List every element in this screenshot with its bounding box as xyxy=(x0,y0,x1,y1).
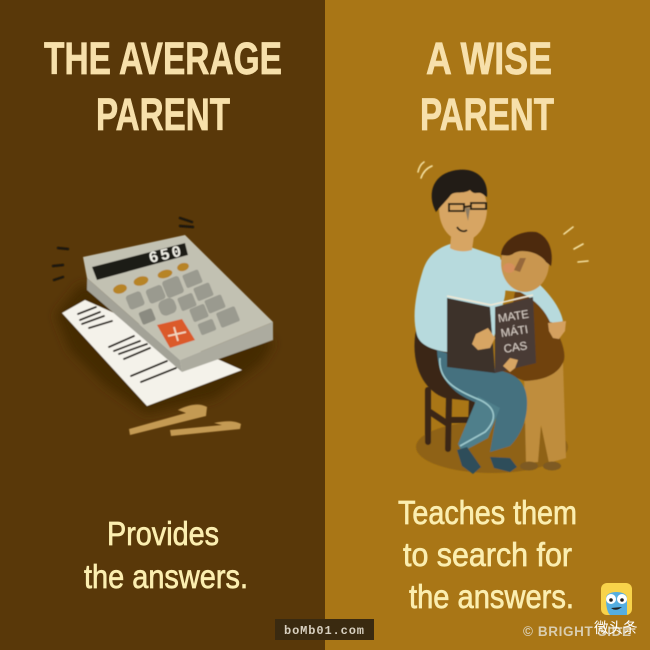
text: teaches them to search for the answers xyxy=(398,494,577,615)
boy's head xyxy=(501,232,552,292)
heading: the average parent: PARENT xyxy=(96,89,230,140)
motion marks near father xyxy=(418,162,432,178)
display reading 650 xyxy=(92,243,188,280)
boy hand on shoulder xyxy=(548,321,566,339)
text: provides the answers: Provides xyxy=(107,515,219,552)
heading: a wise parent: A WISE xyxy=(426,33,552,84)
pencil stubs xyxy=(129,405,241,436)
text: provides the answers: the answers. xyxy=(84,558,248,595)
father's hair xyxy=(432,170,487,212)
text: teaches them to search for the answers: the answers. xyxy=(409,578,574,615)
display reading 650: 650 xyxy=(147,243,183,268)
father's shoes xyxy=(457,447,517,474)
book title: MATE xyxy=(497,309,530,325)
heading: a wise parent xyxy=(420,33,554,140)
grey keypad xyxy=(125,269,240,336)
book title: MÁTI xyxy=(500,323,529,340)
calculator body xyxy=(83,235,273,372)
boy shirt xyxy=(500,292,564,381)
book title: CAS xyxy=(503,340,528,356)
father's arm around boy xyxy=(495,258,563,323)
panel: wise parent background xyxy=(325,0,650,650)
book title xyxy=(497,309,530,356)
icon: toutiao logo xyxy=(601,583,632,615)
paper sheet xyxy=(62,300,242,406)
chair xyxy=(414,330,490,449)
watermark: bomb01.com: boMb01.com xyxy=(284,624,364,638)
text: provides the answers xyxy=(84,515,248,595)
orange top keys xyxy=(112,262,190,295)
illustration: father and son reading xyxy=(414,162,588,474)
book: MATEMATICAS xyxy=(447,295,536,373)
text: teaches them to search for the answers: Teaches them xyxy=(398,494,577,531)
boy trousers xyxy=(524,362,566,463)
hands holding book xyxy=(472,328,518,372)
motion marks xyxy=(53,218,193,280)
text: teaches them to search for the answers: to search for xyxy=(403,536,572,573)
father's sweater xyxy=(415,244,505,352)
heading: a wise parent: PARENT xyxy=(420,89,554,140)
watermark: bomb01.com xyxy=(275,619,374,640)
ground shadow xyxy=(416,421,568,473)
panel: average parent background xyxy=(0,0,325,650)
boy shoes xyxy=(520,462,561,470)
heading: the average parent: THE AVERAGE xyxy=(44,33,282,84)
illustration: calculator on paper xyxy=(53,218,274,436)
glasses xyxy=(449,203,486,211)
motion marks near boy xyxy=(564,227,588,262)
credit: bright side: © BRIGHT SIDE xyxy=(523,624,631,639)
shadow under paper xyxy=(56,285,274,414)
text: toutiao label: 微头条 xyxy=(594,620,638,637)
orange plus key xyxy=(157,319,195,348)
father's trousers xyxy=(437,350,527,452)
heading: the average parent xyxy=(44,33,282,140)
father's head xyxy=(432,170,487,251)
